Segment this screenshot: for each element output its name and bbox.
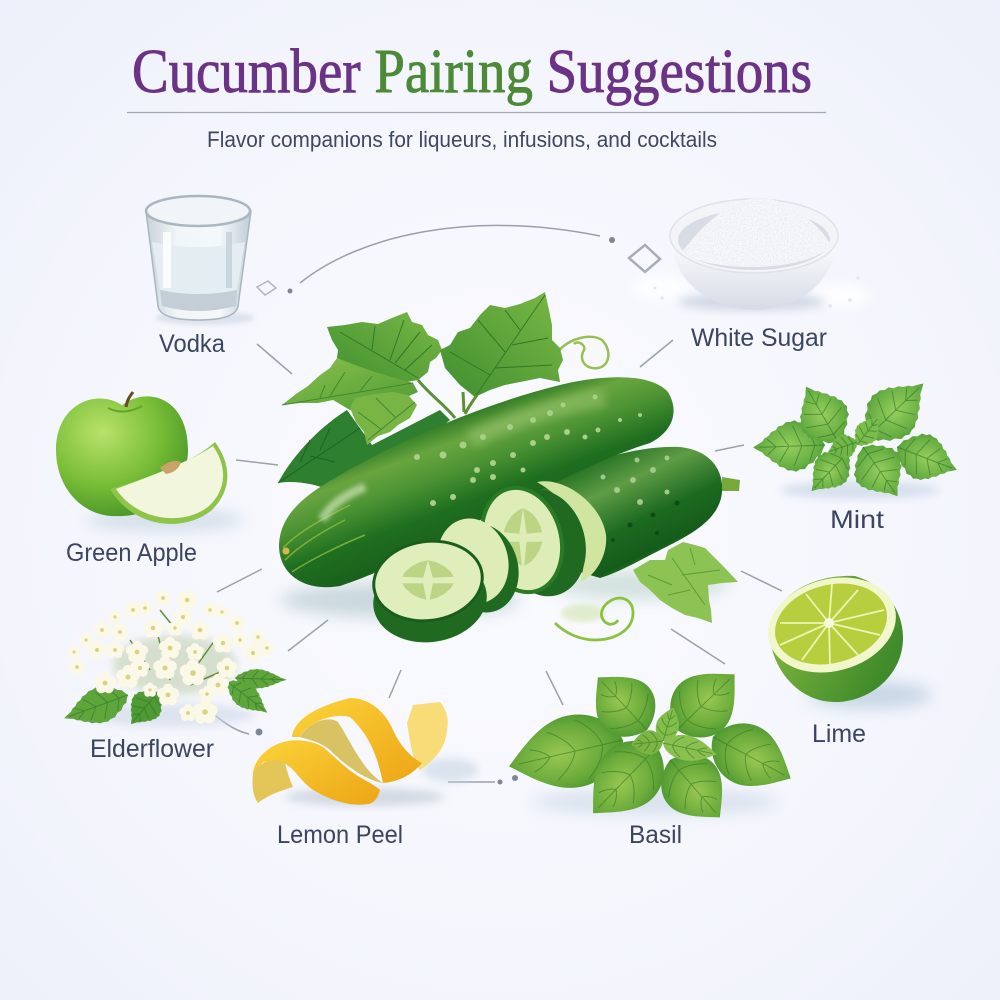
juice pool	[561, 604, 605, 622]
tendril	[558, 337, 608, 368]
label: White Sugar: White Sugar	[691, 324, 827, 352]
lower left leaf	[282, 358, 418, 410]
icon: basil	[501, 652, 805, 837]
title: Cucumber Pairing Suggestions	[132, 38, 812, 106]
second cucumber	[540, 447, 740, 578]
icon: white sugar bowl	[632, 198, 870, 311]
label: Lemon Peel: Lemon Peel	[277, 821, 403, 849]
apple slice	[110, 442, 227, 524]
main cucumber	[279, 377, 674, 587]
icon: green apple	[56, 392, 245, 531]
upper right leaf	[440, 292, 563, 397]
elderflower leaves	[58, 668, 287, 735]
title rule	[127, 112, 826, 114]
label: Elderflower: Elderflower	[90, 735, 214, 763]
central hero: cucumbers and leaves	[278, 292, 740, 650]
cucumber slices	[367, 476, 606, 650]
stem	[722, 477, 740, 491]
slice B	[428, 510, 528, 621]
dark leaf	[278, 410, 450, 490]
label: Mint: Mint	[830, 506, 884, 534]
icon: mint	[752, 364, 965, 511]
label: Green Apple: Green Apple	[66, 539, 197, 567]
cucumber leaves	[278, 292, 563, 490]
upper left leaf	[327, 312, 442, 384]
label: Basil: Basil	[629, 821, 682, 849]
connector lines	[216, 226, 782, 785]
center lower leaf	[350, 392, 417, 445]
icon: elderflower	[58, 589, 287, 735]
icon: lemon peel	[253, 698, 478, 806]
inner pale curl	[407, 702, 448, 770]
subtitle: Flavor companions for liqueurs, infusions, and cocktails	[207, 127, 717, 152]
icon: vodka glass	[146, 196, 255, 325]
label: Lime: Lime	[812, 720, 866, 748]
small leaf	[633, 542, 738, 623]
curl	[555, 598, 633, 640]
slice A	[367, 533, 492, 650]
slice C	[468, 476, 598, 606]
icon: lime	[757, 564, 932, 709]
slice D	[537, 481, 606, 582]
label: Vodka: Vodka	[159, 330, 225, 358]
